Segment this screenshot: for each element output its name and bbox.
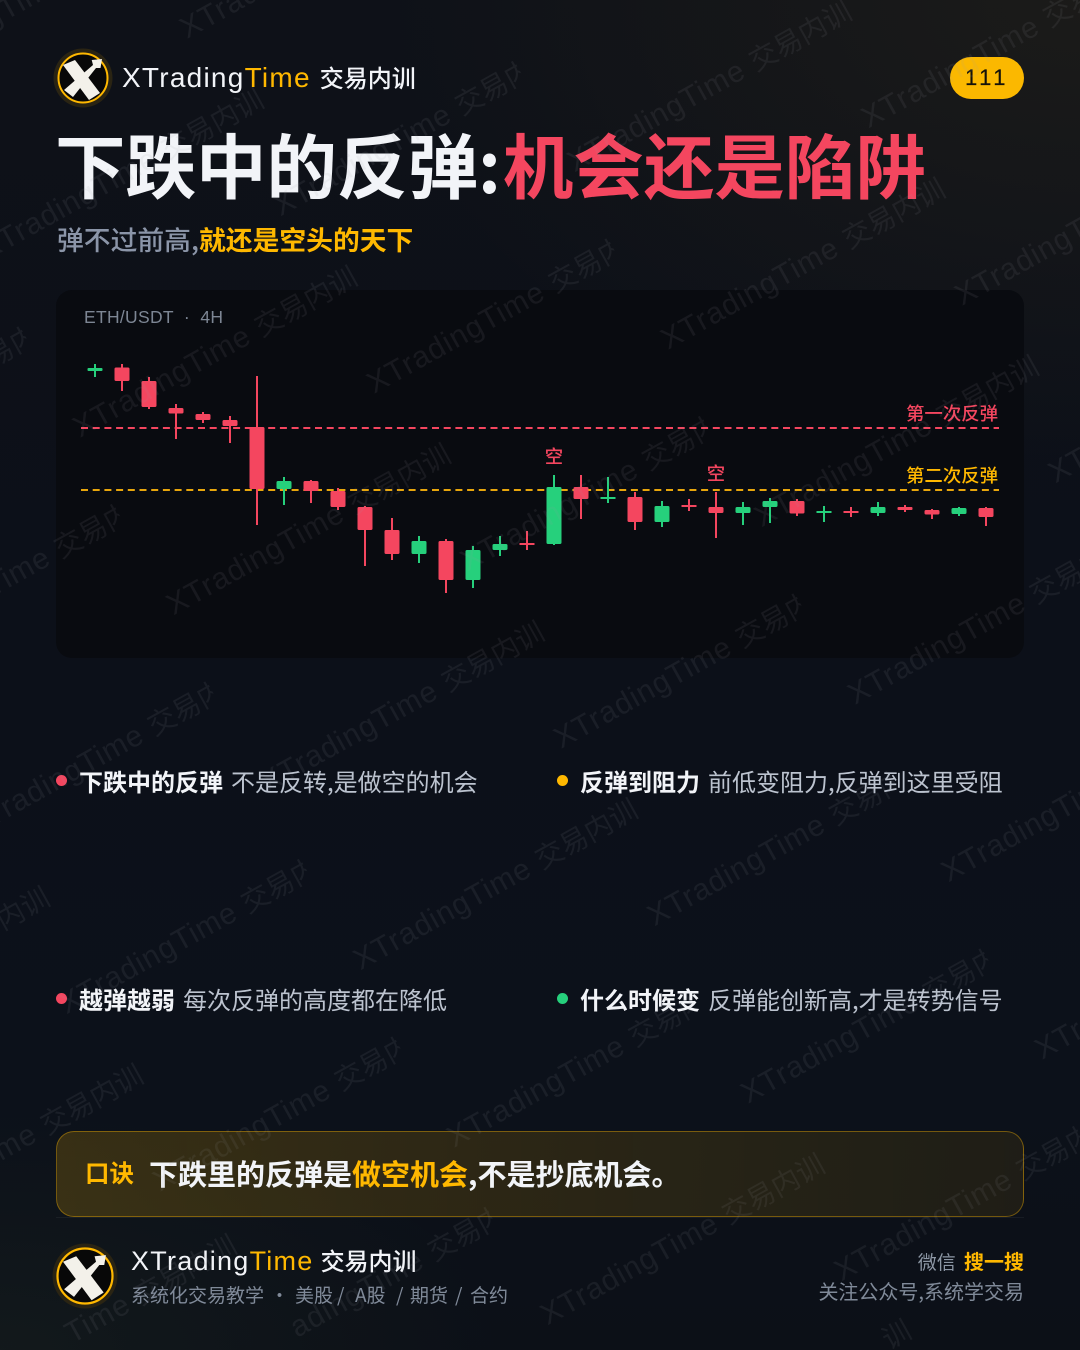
footer tagline: 系统化交易教学 [131, 1281, 264, 1308]
footer tagline: · [270, 1281, 289, 1308]
callout text: 下跌里的反弹是做空机会,不是抄底机会。 [149, 1152, 680, 1194]
bullet: 越弹越弱: 越弹越弱 每次反弹的高度都在降低 [79, 981, 447, 1016]
candlestick chart [81, 364, 999, 593]
footer tagline: 期货 [410, 1281, 448, 1308]
watermark pattern: XTradingTime 交易内训 [548, 571, 844, 755]
watermark pattern: XTradingTime 交易内训 [655, 172, 951, 356]
bullet: 反弹到阻力: 反弹到阻力 前低变阻力,反弹到这里受阻 [580, 763, 1003, 798]
icon: XTradingTime logo [54, 48, 112, 108]
panel: candlestick chart [56, 290, 1024, 658]
watermark pattern: adingTime 交易内训 [284, 1185, 536, 1344]
footer tagline: 合约 [470, 1281, 508, 1308]
footer tagline: / [337, 1281, 344, 1308]
subtitle: 弹不过前高,就还是空头的天下 [57, 219, 413, 258]
icon: footer logo [52, 1244, 118, 1308]
candlestick chart: 第二次反弹 [906, 462, 998, 488]
watermark pattern: XTradingTime 交易内训 [161, 438, 456, 622]
watermark pattern: XTradingTime 交易内训 [147, 1014, 443, 1198]
footer brand name: XTradingTime 交易内训 [131, 1242, 417, 1277]
callout: 口诀 [56, 1131, 1024, 1217]
follow text: 关注公众号,系统学交易 [818, 1276, 1024, 1305]
candlestick chart: 空 [545, 443, 563, 469]
watermark pattern: XTradingTime 交易内训 [535, 1148, 830, 1332]
footer tagline: / [396, 1281, 403, 1308]
watermark pattern: XTradingTime 交易内训 [735, 926, 1031, 1110]
header brand [54, 48, 416, 108]
watermark pattern: Time 交易内训 [59, 1229, 242, 1350]
bullet: 什么时候变: 什么时候变 反弹能创新高,才是转势信号 [580, 981, 1003, 1016]
title: 下跌中的反弹:机会还是陷阱 [55, 112, 926, 214]
issue number badge [950, 57, 1024, 99]
footer tagline: / [455, 1281, 462, 1308]
footer brand [52, 1242, 508, 1308]
watermark pattern: XTradingTime 交易内训 [361, 216, 657, 400]
candlestick chart: 空 [707, 460, 725, 486]
footer tagline: A股 [355, 1281, 386, 1308]
footer tagline: 美股 [295, 1281, 333, 1308]
watermark pattern: XTradingTime 交易内训 [254, 615, 550, 799]
watermark pattern: XTradingTime 交易内训 [455, 394, 750, 578]
watermark pattern: XTradingTime 交易内训 [54, 837, 349, 1021]
brand name: XTradingTime 交易内训 [122, 59, 416, 94]
watermark pattern: XTradingTime 交易内训 [441, 970, 737, 1154]
issue number badge: 111 [965, 65, 1009, 90]
callout label: 口诀 [85, 1155, 134, 1190]
watermark pattern: XTradingTime 交易内训 [268, 39, 563, 223]
watermark pattern: XTradingTime 交易内训 [348, 793, 643, 977]
chart label: ETH/USDT · 4H [84, 307, 223, 327]
watermark pattern: XTradingTime 交易内训 [562, 0, 857, 179]
wechat search: 微信 搜一搜 [918, 1246, 1024, 1275]
watermark pattern: XTradingTime 交易内训 [67, 260, 363, 444]
watermark pattern: XTradingTime 交易内训 [749, 350, 1044, 534]
candlestick chart: 第一次反弹 [906, 400, 998, 426]
footer right contact [818, 1246, 1024, 1305]
footer tagline [131, 1281, 508, 1308]
bullet: 下跌中的反弹: 下跌中的反弹 不是反转,是做空的机会 [79, 763, 478, 798]
watermark pattern: XTradingTime 交易内训 [642, 749, 937, 933]
